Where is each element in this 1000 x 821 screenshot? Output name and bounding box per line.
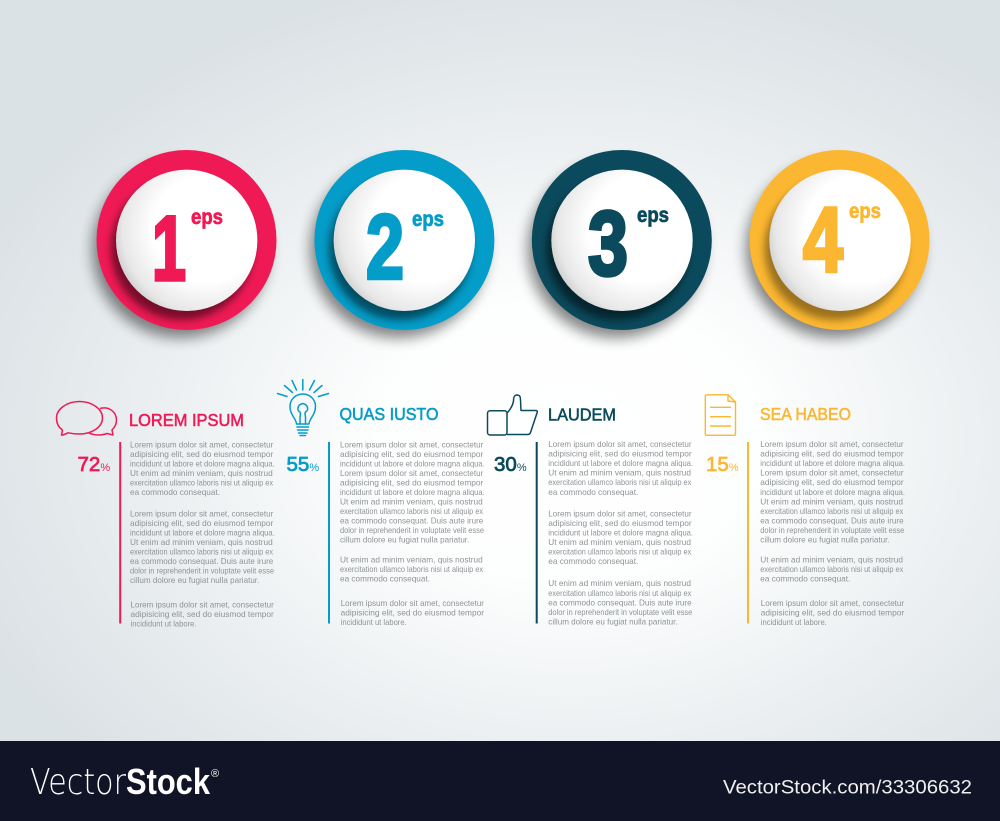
body text	[130, 440, 275, 628]
footer bar	[0, 741, 1000, 821]
body text: Ut enim ad minim veniam, quis nostrud	[760, 556, 903, 564]
body text	[760, 440, 905, 627]
body text: cillum dolore eu fugiat nulla pariatur.	[130, 576, 259, 585]
circle 2	[310, 150, 494, 338]
body text: adipisicing elit, sed do eiusmod tempor	[130, 519, 274, 528]
body text: dolor in reprehenderit in voluptate velit esse	[340, 526, 484, 535]
body text: ea commodo consequat. Duis aute irure	[548, 598, 692, 607]
body text: exercitation ullamco laboris nisi ut aliquip ex	[760, 507, 903, 516]
body text: exercitation ullamco laboris nisi ut aliquip ex	[340, 507, 483, 516]
vertical bar	[536, 442, 538, 624]
body text: incididunt ut labore et dolore magna aliqua.	[340, 488, 485, 497]
body text: Lorem ipsum dolor sit amet, consectetur	[548, 440, 692, 449]
body text: cillum dolore eu fugiat nulla pariatur.	[340, 536, 469, 544]
circle 1: eps	[191, 206, 223, 229]
body text: adipisicing elit, sed do eiusmod tempor	[341, 609, 484, 618]
vertical bar	[747, 442, 749, 624]
percentage: 72%	[78, 453, 110, 476]
body text	[340, 440, 485, 627]
column 2: quas iusto	[278, 380, 485, 627]
body text: exercitation ullamco laboris nisi ut aliquip ex	[340, 565, 483, 574]
body text: Ut enim ad minim veniam, quis nostrud	[760, 497, 903, 506]
body text: incididunt ut labore et dolore magna aliqua.	[340, 460, 485, 468]
body text: adipisicing elit, sed do eiusmod tempor	[760, 478, 904, 487]
vertical bar	[328, 442, 330, 624]
body text: Ut enim ad minim veniam, quis nostrud	[340, 498, 483, 506]
body text: incididunt ut labore et dolore magna aliqua.	[760, 459, 905, 468]
body text: Lorem ipsum dolor sit amet, consectetur	[761, 599, 904, 608]
heading: SEA HABEO	[760, 404, 851, 424]
circle 1	[92, 150, 276, 338]
body text: Lorem ipsum dolor sit amet, consectetur	[130, 509, 274, 518]
body text: exercitation ullamco laboris nisi ut aliquip ex	[760, 565, 903, 574]
heading: QUAS IUSTO	[340, 404, 438, 424]
percentage: 30%	[494, 453, 527, 476]
registered mark: ®	[211, 768, 219, 780]
icon: speech bubbles	[56, 402, 116, 435]
body text: Ut enim ad minim veniam, quis nostrud	[548, 469, 691, 478]
body text: Lorem ipsum dolor sit amet, consectetur	[341, 599, 484, 608]
body text: exercitation ullamco laboris nisi ut aliquip ex	[548, 478, 691, 487]
column 1: lorem ipsum	[56, 402, 275, 628]
body text: Lorem ipsum dolor sit amet, consectetur	[340, 469, 484, 478]
body text: Ut enim ad minim veniam, quis nostrud	[548, 579, 691, 588]
circle 1: 1	[152, 198, 186, 300]
body text: Lorem ipsum dolor sit amet, consectetur	[760, 440, 904, 449]
body text: Lorem ipsum dolor sit amet, consectetur	[130, 440, 274, 450]
body text: Lorem ipsum dolor sit amet, consectetur	[548, 509, 692, 518]
footer id: VectorStock.com/33306632	[723, 777, 972, 799]
body text: ea commodo consequat.	[340, 574, 430, 583]
circle 3	[528, 150, 712, 338]
body text: Lorem ipsum dolor sit amet, consectetur	[130, 600, 274, 609]
heading: LOREM IPSUM	[129, 410, 244, 430]
body text: cillum dolore eu fugiat nulla pariatur.	[760, 535, 890, 544]
body text: adipisicing elit, sed do eiusmod tempor	[761, 609, 904, 618]
body text: Ut enim ad minim veniam, quis nostrud	[130, 538, 273, 547]
body text: adipisicing elit, sed do eiusmod tempor	[340, 450, 484, 459]
icon: document	[705, 395, 736, 435]
body text: cillum dolore eu fugiat nulla pariatur.	[548, 618, 678, 627]
body text: Ut enim ad minim veniam, quis nostrud	[340, 555, 483, 564]
circle 2: 2	[366, 196, 404, 298]
body text: dolor in reprehenderit in voluptate velit esse	[760, 526, 905, 535]
body text: Lorem ipsum dolor sit amet, consectetur	[760, 469, 904, 478]
body text: incididunt ut labore.	[341, 618, 407, 627]
icon: light bulb	[278, 380, 328, 436]
heading: LAUDEM	[548, 404, 616, 424]
body text: adipisicing elit, sed do eiusmod tempor	[130, 610, 274, 619]
body text: ea commodo consequat.	[130, 488, 220, 497]
circle 4: 4	[803, 190, 843, 292]
body text: ea commodo consequat.	[548, 488, 638, 497]
circle 3: 3	[588, 193, 628, 295]
body text: incididunt ut labore et dolore magna aliqua.	[130, 528, 275, 537]
body text: adipisicing elit, sed do eiusmod tempor	[340, 478, 484, 488]
body text: ea commodo consequat. Duis aute irure	[760, 516, 904, 525]
percentage: 15%	[706, 453, 739, 476]
footer logo: Stock	[126, 761, 211, 802]
body text: incididunt ut labore.	[130, 619, 196, 628]
body text: Ut enim ad minim veniam, quis nostrud	[548, 538, 691, 547]
footer logo: Vector	[30, 762, 126, 803]
body text: adipisicing elit, sed do eiusmod tempor	[548, 519, 692, 528]
body text: exercitation ullamco laboris nisi ut aliquip ex	[548, 589, 691, 598]
body text: Lorem ipsum dolor sit amet, consectetur	[340, 440, 484, 450]
body text: exercitation ullamco laboris nisi ut aliquip ex	[130, 547, 273, 556]
column 4: sea habeo	[705, 395, 905, 627]
body text: Ut enim ad minim veniam, quis nostrud	[130, 469, 273, 478]
body text: incididunt ut labore et dolore magna aliqua.	[130, 460, 275, 468]
vertical bar	[119, 442, 121, 624]
circle 4: eps	[849, 200, 881, 223]
circle 3: eps	[637, 204, 669, 227]
circle 2: eps	[412, 208, 444, 231]
body text: incididunt ut labore.	[761, 618, 827, 627]
circle 4	[746, 150, 930, 338]
body text: exercitation ullamco laboris nisi ut aliquip ex	[548, 547, 691, 556]
body text	[548, 440, 693, 627]
body text: incididunt ut labore et dolore magna aliqua.	[548, 459, 693, 468]
percentage: 55%	[286, 453, 319, 476]
body text: adipisicing elit, sed do eiusmod tempor	[130, 450, 274, 459]
body text: incididunt ut labore et dolore magna aliqua.	[760, 488, 905, 497]
body text: ea commodo consequat.	[760, 575, 850, 584]
body text: ea commodo consequat. Duis aute irure	[340, 516, 484, 526]
body text: adipisicing elit, sed do eiusmod tempor	[760, 450, 904, 459]
column 3: laudem	[488, 395, 693, 627]
body text: exercitation ullamco laboris nisi ut aliquip ex	[130, 478, 273, 488]
body text: ea commodo consequat. Duis aute irure	[130, 557, 274, 566]
icon: thumbs up	[488, 395, 537, 435]
body text: ea commodo consequat.	[548, 557, 638, 566]
body text: adipisicing elit, sed do eiusmod tempor	[548, 450, 692, 459]
body text: incididunt ut labore et dolore magna aliqua.	[548, 528, 693, 537]
body text: dolor in reprehenderit in voluptate velit esse	[130, 566, 274, 575]
body text: dolor in reprehenderit in voluptate velit esse	[548, 608, 693, 617]
